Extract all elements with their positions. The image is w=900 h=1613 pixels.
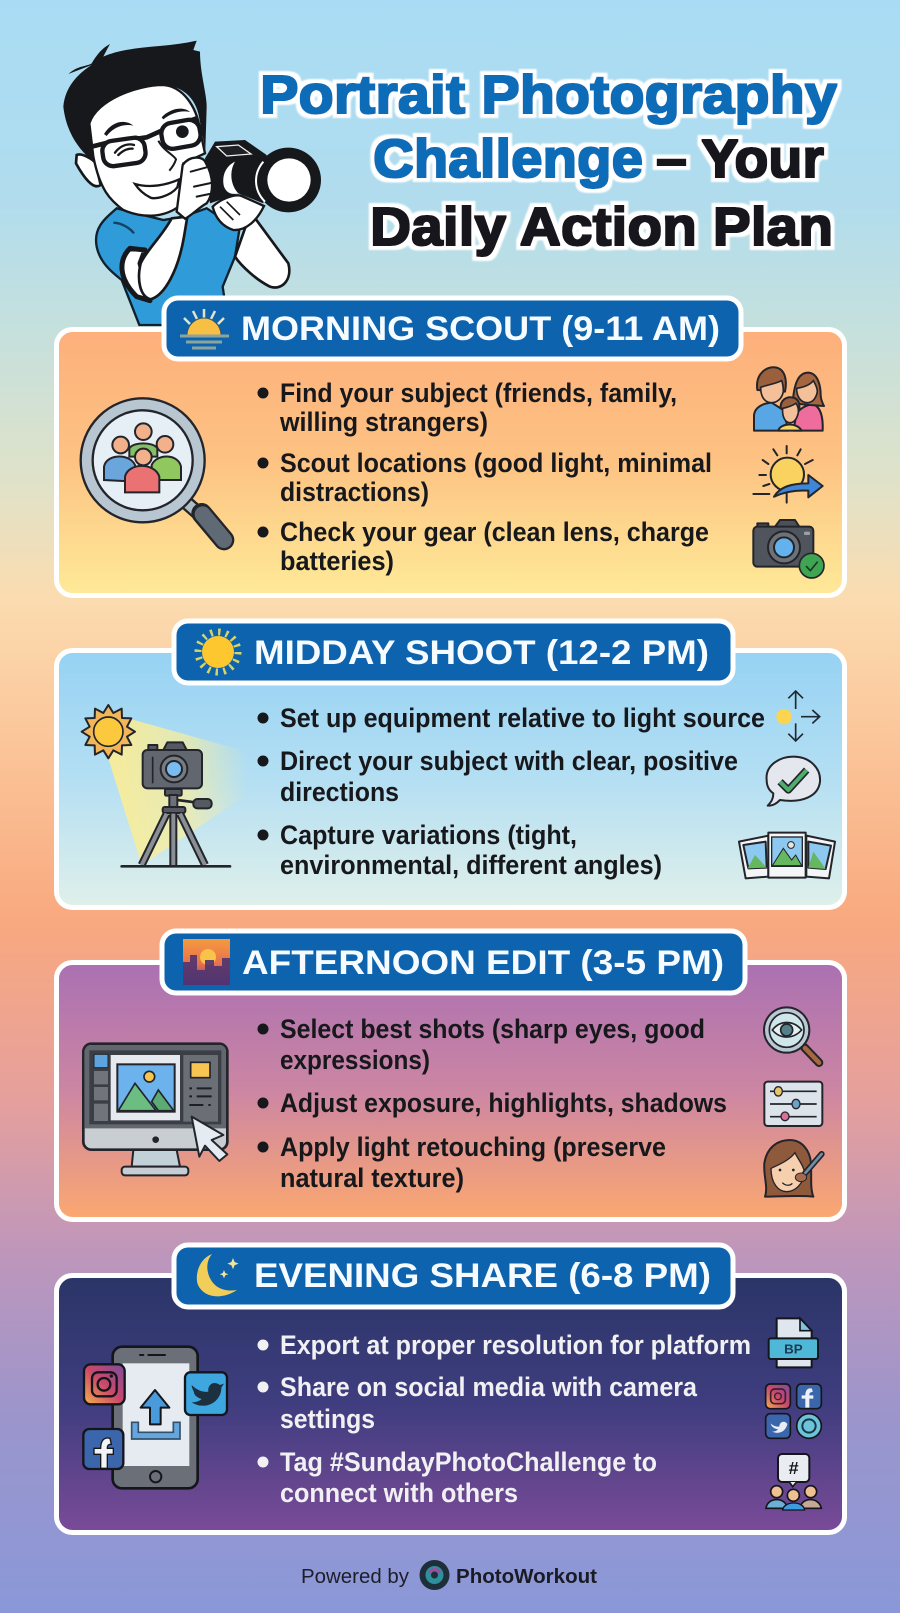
icon: camera on tripod with sun — [82, 705, 247, 866]
bullet list: Adjust exposure, highlights, shadows — [280, 1088, 727, 1118]
footer: powered by PhotoWorkout — [301, 1560, 597, 1590]
icon: PhotoWorkout logo — [420, 1560, 450, 1590]
bullet list: Tag #SundayPhotoChallenge to — [280, 1447, 657, 1477]
panel card — [56, 650, 844, 908]
illustration: photographer with camera — [63, 41, 321, 325]
panel: afternoon edit — [56, 931, 844, 1220]
bullet list: Capture variations (tight, — [280, 820, 577, 850]
heading pill — [174, 1245, 733, 1307]
bullet list: willing strangers) — [279, 407, 488, 437]
bullet list: natural texture) — [280, 1163, 464, 1193]
bullet list — [258, 378, 712, 576]
bullet list: directions — [280, 777, 399, 807]
bullet list: connect with others — [280, 1478, 518, 1508]
heading text: MIDDAY SHOOT (12-2 PM) — [254, 634, 709, 672]
bullet list: environmental, different angles) — [280, 850, 662, 880]
icon: monitor with photo editor — [83, 1044, 227, 1175]
heading text: EVENING SHARE (6-8 PM) — [254, 1257, 711, 1295]
bullet list — [258, 703, 765, 880]
title: Portrait Photography — [260, 65, 837, 125]
heading pill — [164, 298, 741, 359]
bullet list: expressions) — [280, 1045, 430, 1075]
icon: magnifier over people — [81, 398, 224, 540]
title: Daily Action Plan — [370, 197, 833, 257]
panel card — [56, 330, 844, 596]
bullet list — [258, 1014, 727, 1193]
bullet list: Export at proper resolution for platform — [280, 1330, 751, 1360]
bullet list: Share on social media with camera — [280, 1372, 698, 1402]
bullet list: settings — [280, 1404, 375, 1434]
bullet list: Direct your subject with clear, positive — [280, 746, 738, 776]
heading text: AFTERNOON EDIT (3-5 PM) — [242, 944, 724, 982]
bullet list: distractions) — [280, 477, 429, 507]
bullet list: Scout locations (good light, minimal — [280, 448, 712, 478]
title: – Your — [656, 129, 824, 189]
icons: light direction, speech check, photos — [739, 691, 835, 878]
bullet list: Apply light retouching (preserve — [280, 1132, 666, 1162]
bullet list: Find your subject (friends, family, — [280, 378, 677, 408]
icons: family, sun, camera check — [753, 367, 824, 578]
icons: export file, social grid, hashtag community: BP — [784, 1341, 803, 1356]
icons: export file, social grid, hashtag community — [766, 1318, 821, 1510]
icons: export file, social grid, hashtag community: # — [789, 1458, 799, 1478]
panel: evening share — [56, 1245, 844, 1532]
icon: city sunset — [183, 939, 230, 985]
bullet list: Check your gear (clean lens, charge — [280, 517, 709, 547]
bullet list: batteries) — [280, 546, 394, 576]
heading pill — [174, 621, 733, 683]
title: Challenge — [373, 129, 643, 189]
panel: midday shoot — [56, 621, 844, 908]
panel card — [56, 1276, 844, 1532]
icon: crescent moon and stars — [197, 1254, 239, 1296]
icon: sunrise — [180, 309, 229, 348]
bullet list — [258, 1330, 751, 1508]
footer: powered by PhotoWorkout: PhotoWorkout — [456, 1566, 597, 1588]
bullet list: Select best shots (sharp eyes, good — [280, 1014, 705, 1044]
icons: eye magnifier, sliders, retouch face — [764, 1007, 822, 1197]
heading pill — [162, 931, 745, 993]
bullet list: Set up equipment relative to light source — [280, 703, 765, 733]
panel: morning scout — [56, 298, 844, 596]
icon: phone with upload and social badges — [83, 1347, 227, 1488]
panel card — [56, 962, 844, 1220]
heading text: MORNING SCOUT (9-11 AM) — [241, 310, 720, 348]
icon: sun — [198, 632, 238, 672]
title — [260, 65, 837, 257]
footer: powered by PhotoWorkout: Powered by — [301, 1566, 409, 1588]
